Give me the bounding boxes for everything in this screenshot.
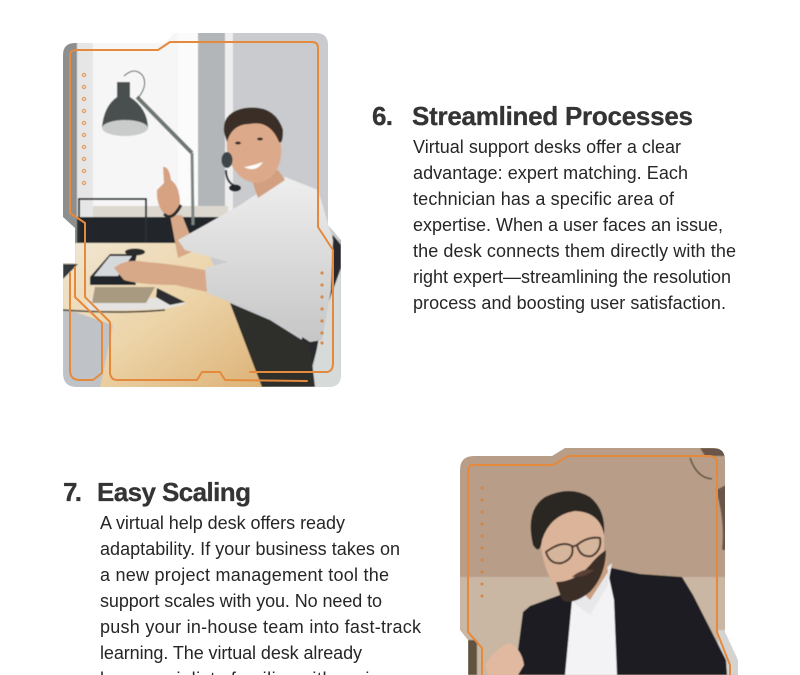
section 6 body text — [413, 137, 736, 313]
desk lamp — [102, 71, 193, 225]
neck and face — [531, 491, 608, 602]
man's trousers — [230, 303, 315, 387]
section 7 heading: 7. — [63, 477, 82, 507]
man's torso and arms — [114, 177, 333, 342]
section 7 heading: Easy Scaling — [97, 477, 251, 507]
section 7 body text: adaptability. If your business takes on — [100, 539, 400, 559]
keyboard — [90, 248, 145, 285]
wall and window background — [60, 30, 345, 390]
section 6 body text: the desk connects them directly with the — [413, 241, 736, 261]
hand — [485, 643, 524, 675]
glasses — [546, 538, 600, 563]
section 6 body text: expertise. When a user faces an issue, — [413, 215, 723, 235]
section 7 photo: man in suit and glasses with orange frame — [455, 445, 745, 675]
section 6 body text: process and boosting user satisfaction. — [413, 293, 726, 313]
section 6 body text: technician has a specific area of — [413, 189, 675, 209]
desk — [63, 243, 267, 388]
section 6 photo: support technician at desk with orange frame — [60, 30, 345, 390]
section 7 body text: learning. The virtual desk already — [100, 643, 362, 663]
man's thumbs-up hand — [157, 167, 181, 217]
section 7 body text — [100, 513, 422, 675]
beige wall background — [455, 445, 745, 675]
orange dot column — [480, 486, 484, 598]
orange tech frame lines — [70, 42, 333, 381]
section 6 body text: advantage: expert matching. Each — [413, 163, 688, 183]
chair — [300, 235, 341, 375]
section 7 body text: a new project management tool the — [100, 565, 389, 585]
jacket — [515, 568, 727, 675]
section 6 heading: Streamlined Processes — [412, 101, 693, 131]
shirt — [565, 563, 617, 675]
section 7 body text: push your in-house team into fast-track — [100, 617, 422, 637]
section 6 body text: Virtual support desks offer a clear — [413, 137, 681, 157]
section 6 body text: right expert—streamlining the resolution — [413, 267, 731, 287]
section 6 heading: 6. — [372, 101, 393, 131]
section 7 body text: support scales with you. No need to — [100, 591, 382, 611]
orange dot columns — [82, 73, 324, 345]
section 7 body text: A virtual help desk offers ready — [100, 513, 345, 533]
orange tech frame lines — [468, 456, 730, 675]
man's head and headset — [221, 107, 287, 198]
laptop and papers — [63, 264, 186, 388]
